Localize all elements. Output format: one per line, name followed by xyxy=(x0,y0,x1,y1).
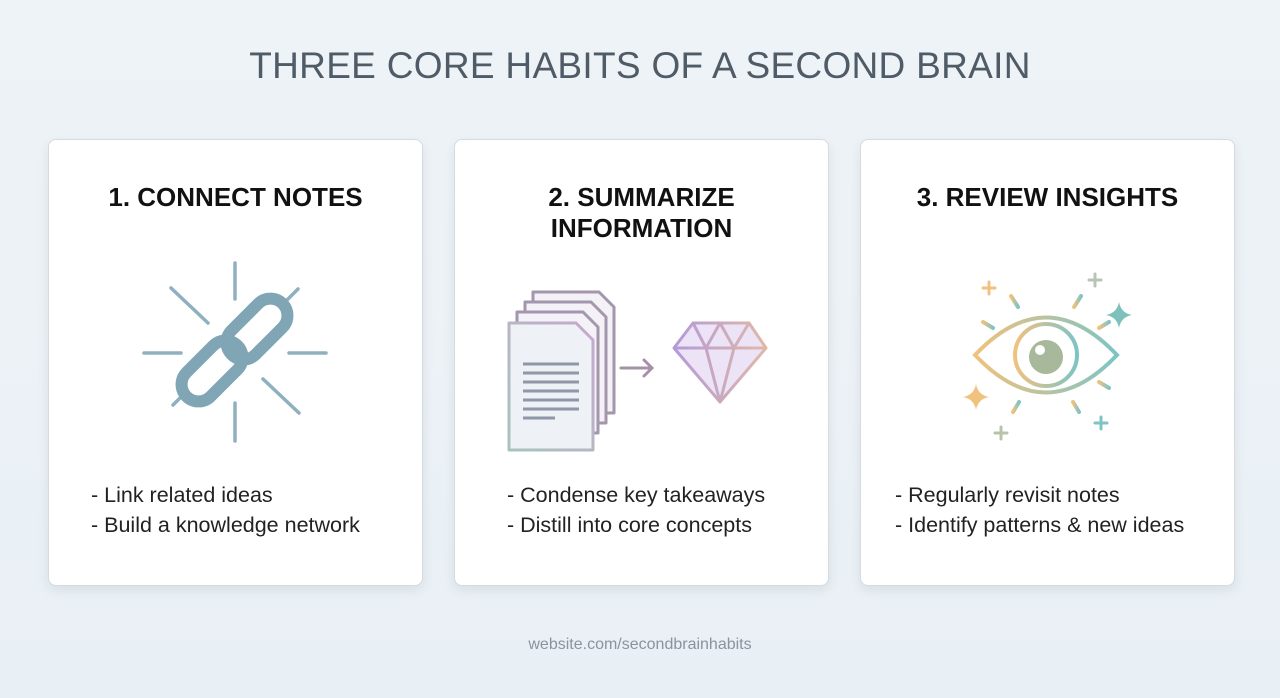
footer url: website.com/secondbrainhabits xyxy=(528,636,752,653)
heading xyxy=(548,182,735,243)
bullets: - Identify patterns & new ideas xyxy=(895,513,1184,537)
bullets xyxy=(507,483,765,537)
heading: INFORMATION xyxy=(551,213,732,243)
heading: 3. REVIEW INSIGHTS xyxy=(917,182,1178,212)
bullets xyxy=(91,483,360,537)
bullets: - Link related ideas xyxy=(91,483,273,507)
panel: connect notes xyxy=(48,139,423,586)
bullets: - Regularly revisit notes xyxy=(895,483,1120,507)
bullets: - Distill into core concepts xyxy=(507,513,752,537)
icon: documents to diamond xyxy=(508,290,768,452)
icon: chain link xyxy=(142,261,328,443)
heading: 1. CONNECT NOTES xyxy=(108,182,363,212)
title: THREE CORE HABITS OF A SECOND BRAIN xyxy=(249,45,1031,86)
bullets: - Build a knowledge network xyxy=(91,513,360,537)
icon: eye with sparkles xyxy=(963,272,1132,440)
heading: 2. SUMMARIZE xyxy=(548,182,735,212)
bullets xyxy=(895,483,1184,537)
bullets: - Condense key takeaways xyxy=(507,483,765,507)
panel: review insights xyxy=(860,139,1235,586)
panel: summarize information xyxy=(454,139,829,586)
